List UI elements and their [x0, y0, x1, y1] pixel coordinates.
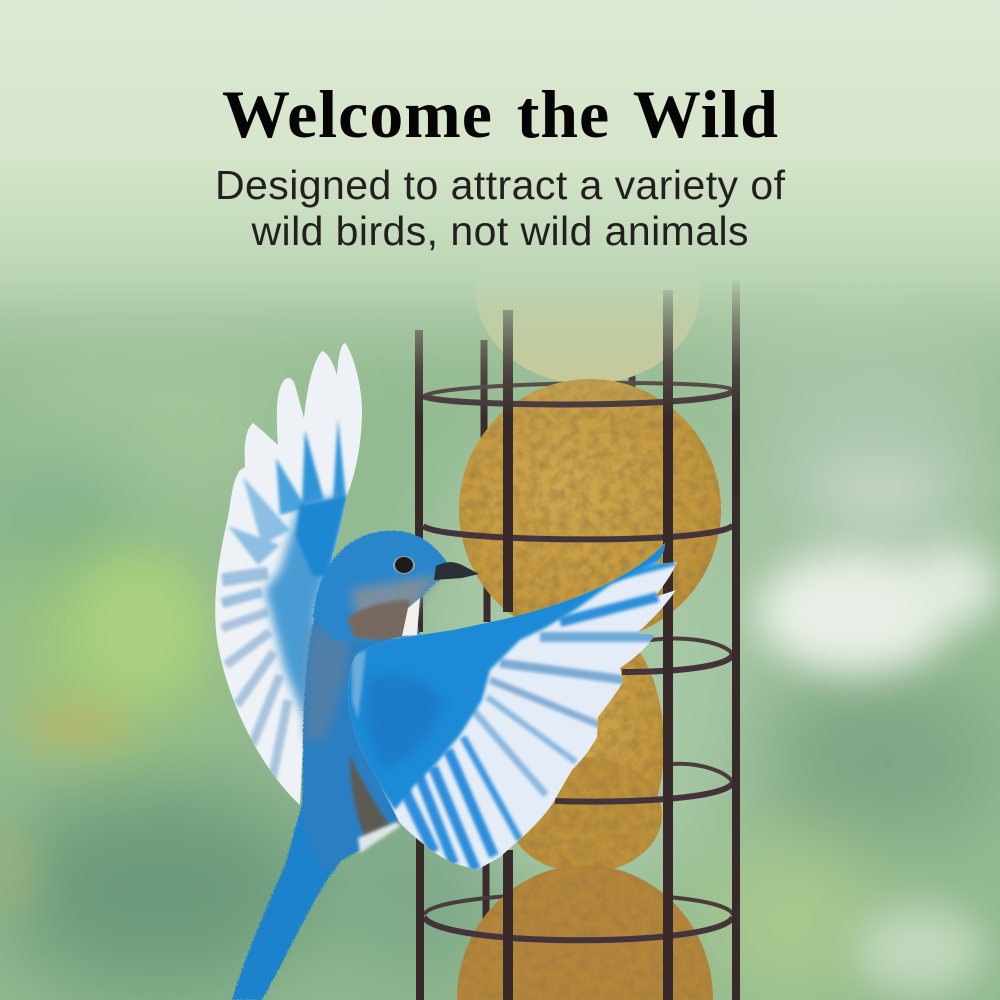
- white belly: [358, 822, 400, 853]
- bluebird: [215, 343, 677, 1000]
- subtitle: Designed to attract a variety of: [215, 162, 786, 208]
- suet balls: [457, 290, 721, 1000]
- front rings: [423, 391, 733, 940]
- raised back wing: [215, 343, 362, 805]
- back rods: [484, 340, 632, 920]
- chest shading: [306, 625, 350, 740]
- suet feeder: [419, 200, 736, 1000]
- back rings: [423, 383, 733, 915]
- top haze fading feeder into background: [0, 0, 1000, 420]
- subtitle: [215, 162, 786, 254]
- flank: [350, 755, 392, 838]
- vertical rods: [419, 280, 736, 1000]
- feather stripes: [403, 562, 675, 870]
- head: [313, 531, 479, 642]
- tail: [232, 800, 362, 1000]
- front wing: [340, 540, 677, 870]
- subtitle: wild birds, not wild animals: [250, 208, 748, 254]
- title: Welcome the Wild: [222, 76, 778, 152]
- cheek shading: [350, 574, 440, 632]
- brown throat: [347, 600, 410, 640]
- body: [302, 590, 420, 872]
- white throat: [402, 598, 420, 636]
- beak: [434, 562, 479, 580]
- blue coverts: [340, 540, 672, 810]
- eye: [393, 556, 415, 574]
